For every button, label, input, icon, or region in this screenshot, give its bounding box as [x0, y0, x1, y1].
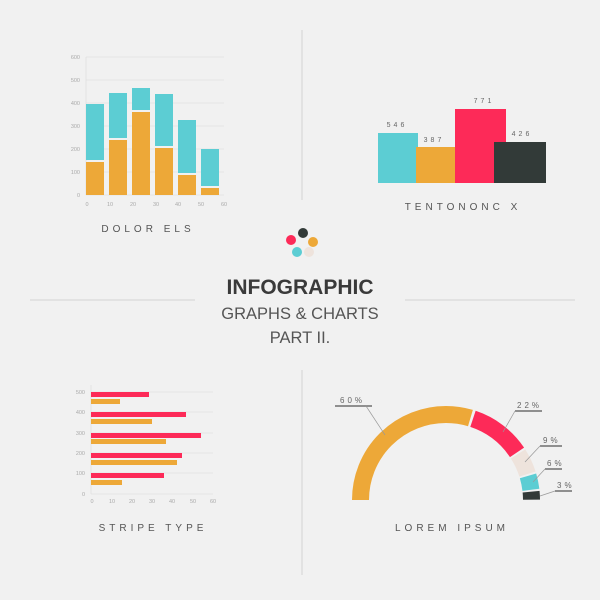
label: LOREM IPSUM: LOREM IPSUM: [395, 523, 509, 534]
chart: column chart (top-right): 546: [387, 122, 407, 129]
chart: horizontal bar chart (bottom-left): [76, 385, 216, 505]
chart: semicircle donut (bottom-right): [335, 396, 575, 500]
label: DOLOR ELS: DOLOR ELS: [101, 224, 195, 235]
chart: column chart (top-right): 387: [424, 137, 444, 144]
label: STRIPE TYPE: STRIPE TYPE: [99, 523, 207, 534]
chart: column chart (top-right): 771: [474, 98, 494, 105]
chart: horizontal bar chart (bottom-left): 100: [76, 471, 85, 477]
chart: semicircle donut (bottom-right): 9%: [543, 436, 561, 445]
chart: stacked bar chart (top-left): 400: [71, 101, 80, 107]
chart: semicircle donut (bottom-right): 6%: [547, 459, 565, 468]
title: PART II.: [270, 329, 330, 347]
chart: stacked bar chart (top-left): 200: [71, 147, 80, 153]
chart: stacked bar chart (top-left): 0: [85, 202, 89, 208]
chart: horizontal bar chart (bottom-left): 0: [82, 492, 85, 498]
title: [221, 276, 379, 347]
chart: horizontal bar chart (bottom-left): 0: [90, 499, 94, 505]
chart: stacked bar chart (top-left): 300: [71, 124, 80, 130]
chart: horizontal bar chart (bottom-left): 10: [109, 499, 115, 505]
chart: horizontal bar chart (bottom-left): 300: [76, 431, 85, 437]
chart: stacked bar chart (top-left): 600: [71, 55, 80, 61]
chart: horizontal bar chart (bottom-left): 30: [149, 499, 155, 505]
chart: stacked bar chart (top-left): 500: [71, 78, 80, 84]
chart: horizontal bar chart (bottom-left): 60: [210, 499, 216, 505]
title: GRAPHS & CHARTS: [221, 305, 379, 323]
chart: stacked bar chart (top-left): 20: [130, 202, 136, 208]
chart: stacked bar chart (top-left): 0: [77, 193, 80, 199]
chart: stacked bar chart (top-left): 10: [107, 202, 113, 208]
chart: stacked bar chart (top-left): 100: [71, 170, 80, 176]
chart: column chart (top-right): 426: [512, 131, 532, 138]
chart: stacked bar chart (top-left): 30: [153, 202, 159, 208]
chart: horizontal bar chart (bottom-left): 40: [169, 499, 175, 505]
chart: stacked bar chart (top-left): 40: [175, 202, 181, 208]
label: TENTONONC X: TENTONONC X: [405, 202, 521, 213]
chart: semicircle donut (bottom-right): 60%: [340, 396, 365, 405]
chart: stacked bar chart (top-left): 60: [221, 202, 227, 208]
chart: horizontal bar chart (bottom-left): 20: [129, 499, 135, 505]
chart: horizontal bar chart (bottom-left): 50: [190, 499, 196, 505]
chart: semicircle donut (bottom-right): 22%: [517, 401, 542, 410]
chart: semicircle donut (bottom-right): 3%: [557, 481, 575, 490]
title: INFOGRAPHIC: [226, 276, 374, 299]
chart: horizontal bar chart (bottom-left): 500: [76, 390, 85, 396]
icon: colored dots: [286, 228, 318, 257]
chart: stacked bar chart (top-left): 50: [198, 202, 204, 208]
chart: horizontal bar chart (bottom-left): 200: [76, 451, 85, 457]
chart: column chart (top-right): [378, 98, 546, 183]
chart: stacked bar chart (top-left): [71, 55, 227, 208]
chart: horizontal bar chart (bottom-left): 400: [76, 410, 85, 416]
